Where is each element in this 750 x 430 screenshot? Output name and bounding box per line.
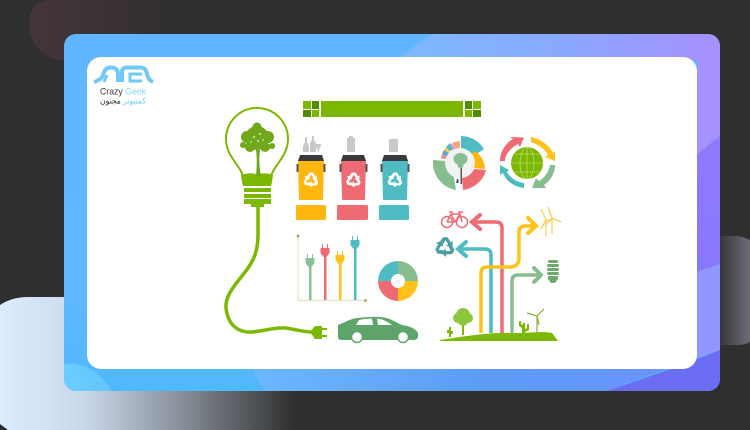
logo arabic tagline: كمبيوتر مجنون <box>100 96 146 106</box>
recycle mark <box>344 172 363 189</box>
axes <box>298 236 365 300</box>
icon: small plant <box>447 327 453 337</box>
center tree <box>454 153 468 184</box>
arrow: green <box>532 165 555 188</box>
icon: cactus <box>519 321 529 335</box>
globe <box>511 147 543 179</box>
recycling bins <box>296 136 410 220</box>
globe with circular arrows <box>500 137 555 188</box>
icon: energy saving bulb <box>547 260 559 283</box>
donut chart <box>378 261 418 301</box>
power cable and plug <box>226 207 327 339</box>
plug head <box>310 326 322 339</box>
tree pie chart <box>433 136 486 190</box>
plug bar: red <box>320 244 330 300</box>
tree leaf highlights <box>250 133 264 143</box>
logo <box>94 68 153 106</box>
car windows <box>356 318 392 325</box>
logo arches <box>94 68 153 82</box>
arrow: teal <box>500 165 524 188</box>
icon: small wind turbine <box>527 309 544 333</box>
waste icon: bottles <box>303 136 321 152</box>
arrow to bicycle <box>472 215 502 333</box>
recycle mark <box>385 172 404 189</box>
outer segments <box>461 136 484 157</box>
teal bin <box>380 155 410 200</box>
recycle mark <box>301 172 320 189</box>
socket bar chart <box>297 235 367 302</box>
blue to purple card <box>64 34 720 391</box>
plug bar: teal <box>350 236 360 300</box>
bin labels <box>296 205 409 220</box>
red bin <box>340 155 368 200</box>
small outer segments <box>441 141 460 159</box>
car wheels <box>352 332 408 342</box>
yellow bin <box>296 155 326 200</box>
plug prongs <box>322 328 327 337</box>
bulb outline <box>226 108 288 176</box>
center disc <box>445 148 475 178</box>
arrow to wind turbines <box>481 218 536 333</box>
waste icon: paper <box>389 139 398 152</box>
plug bar: yellow <box>336 251 344 300</box>
white content panel <box>87 57 697 369</box>
electric car <box>338 317 418 342</box>
screw thread <box>244 188 271 207</box>
light bulb with tree <box>226 108 288 207</box>
car body <box>338 317 418 340</box>
icon: recycling symbol <box>433 237 457 259</box>
logo wordmark: Crazy Geek <box>100 86 146 96</box>
background shape: right gradient block <box>720 236 750 345</box>
green title banner <box>303 101 481 117</box>
icon: bicycle <box>442 212 468 228</box>
bulb base <box>241 173 273 186</box>
arrow: red <box>500 137 524 161</box>
banner left squares <box>303 101 319 117</box>
cable <box>226 207 312 332</box>
arrow: yellow <box>531 137 555 161</box>
ground <box>440 332 558 341</box>
plug bar: green <box>306 254 314 300</box>
arrow to bulb <box>512 268 541 334</box>
background shape: top left blob <box>29 0 170 60</box>
background shape: bottom left gradient block <box>0 297 295 430</box>
waste icon: battery <box>347 136 355 152</box>
arrow to recycling <box>458 242 491 333</box>
direction arrows tree <box>433 207 561 341</box>
icon: tree <box>453 308 473 335</box>
icon: wind turbines <box>541 207 561 236</box>
tree <box>240 122 275 176</box>
banner right squares <box>465 101 481 117</box>
